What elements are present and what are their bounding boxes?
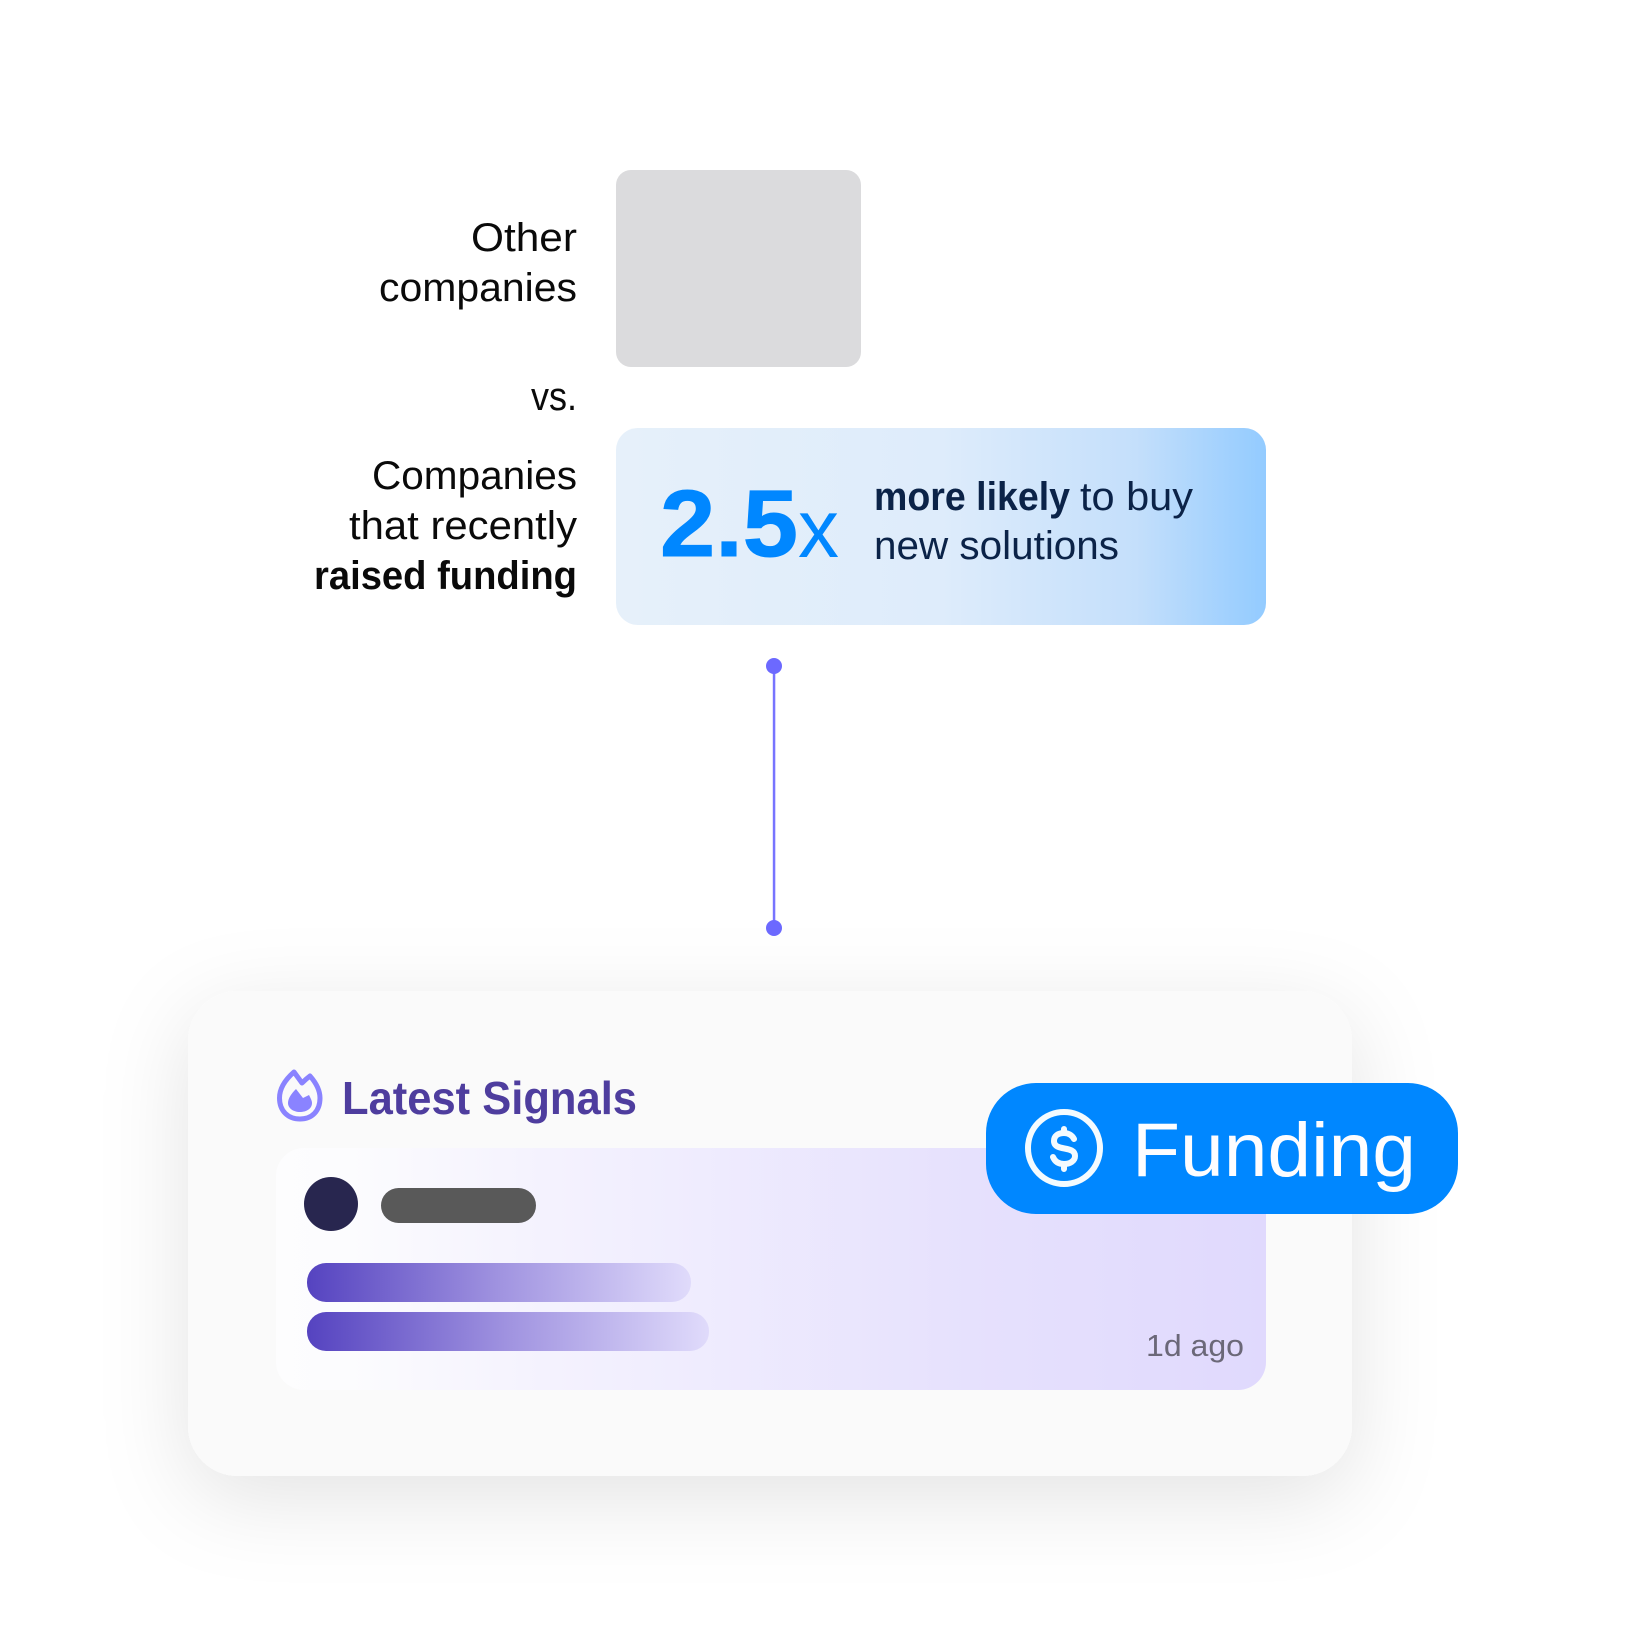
- label: companies that recently raised funding: that recently: [349, 504, 577, 548]
- timestamp: 1d ago: [1146, 1328, 1244, 1363]
- panel: signal row: [276, 1148, 1266, 1390]
- text placeholder line 1: [307, 1263, 691, 1302]
- heading: latest signals: Latest Signals: [342, 1072, 637, 1124]
- stat description: new solutions: [874, 524, 1119, 568]
- stat: 2.5x: x: [798, 482, 839, 575]
- badge label: Funding: [1132, 1108, 1416, 1193]
- stat description: [874, 475, 1193, 568]
- label: companies that recently raised funding: Companies: [372, 454, 577, 498]
- stat description: to buy: [1080, 475, 1193, 519]
- label: other companies: companies: [379, 266, 577, 310]
- avatar: [304, 1177, 358, 1231]
- card: latest signals: [188, 991, 1352, 1476]
- stat: 2.5x: 2.5: [660, 471, 798, 577]
- connector line with dots: [766, 658, 782, 936]
- label: companies that recently raised funding: [314, 454, 577, 598]
- label: vs.: vs.: [531, 375, 577, 419]
- bar: other companies: [616, 170, 861, 367]
- label: other companies: Other: [471, 216, 577, 260]
- name placeholder: [381, 1188, 536, 1223]
- text placeholder line 2: [307, 1312, 709, 1351]
- stat description: more likely: [874, 475, 1071, 519]
- panel: 2.5x more likely: [616, 428, 1266, 625]
- badge: funding: [986, 1083, 1458, 1214]
- icon: dollar coin: [1028, 1112, 1100, 1184]
- label: companies that recently raised funding: raised funding: [314, 554, 577, 598]
- label: other companies: [379, 216, 577, 310]
- icon: flame: [280, 1072, 320, 1119]
